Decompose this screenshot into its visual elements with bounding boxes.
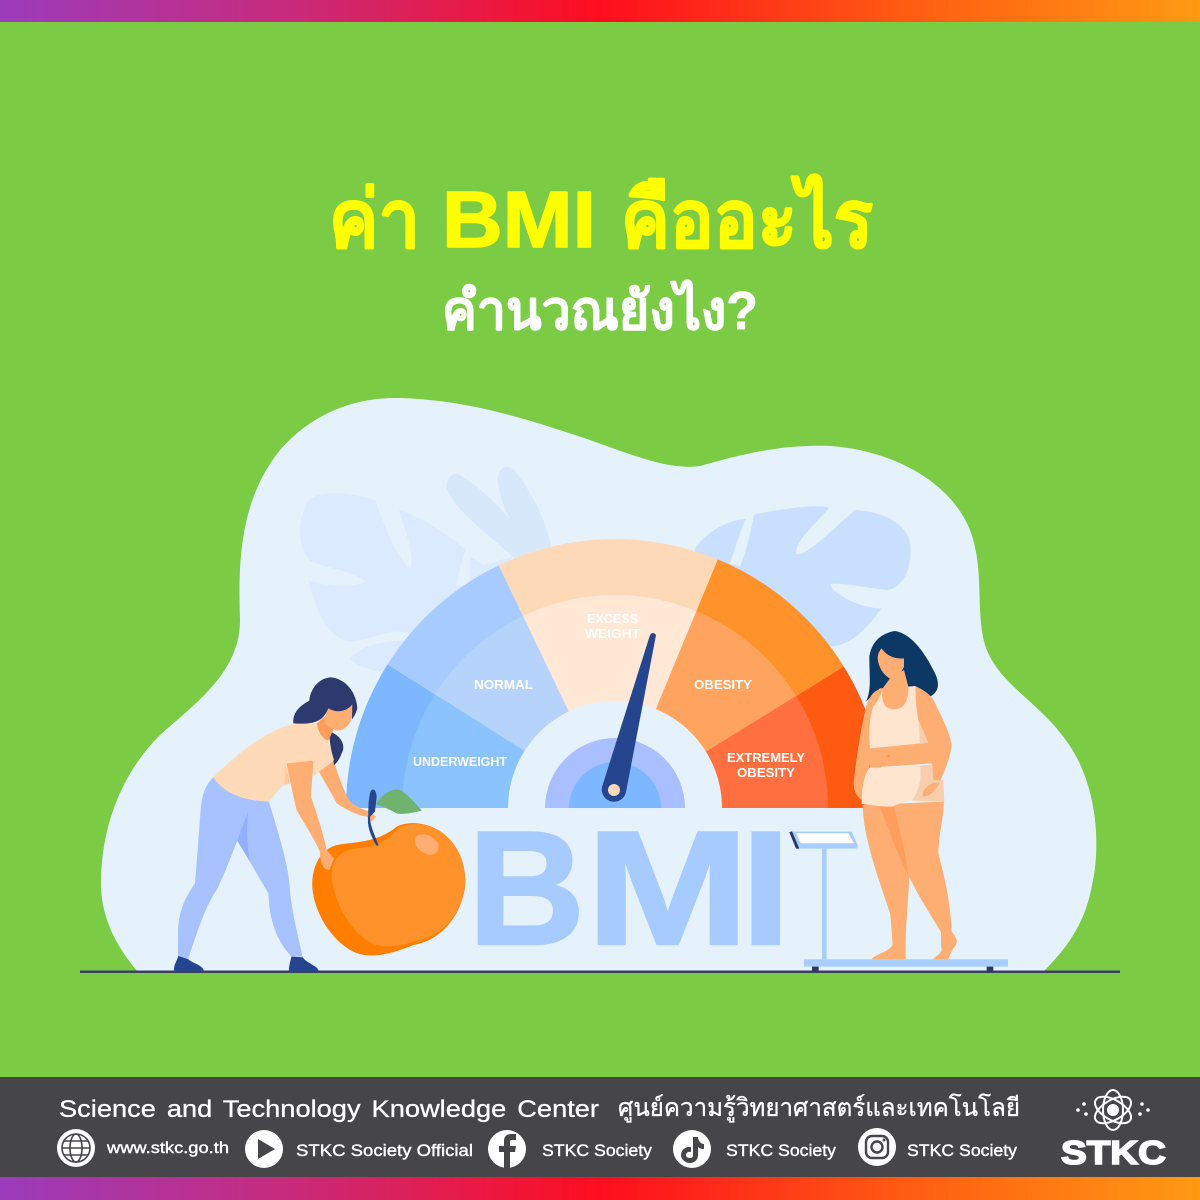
- far fronds: [447, 467, 552, 558]
- top gradient bar: [0, 0, 1200, 22]
- icon: facebook: [488, 1130, 526, 1168]
- label: obesity: OBESITY: [694, 677, 752, 692]
- label: excess weight: EXCESS: [587, 611, 638, 626]
- footer heading english: Science and Technology Knowledge Center: [59, 1096, 599, 1123]
- background blob: [101, 398, 1096, 972]
- website text: www.stkc.go.th: [106, 1140, 229, 1157]
- right leaf: [695, 506, 911, 647]
- label: extremely obesity: OBESITY: [737, 765, 795, 780]
- label: extremely obesity: EXTREMELY: [727, 750, 805, 765]
- facebook text: STKC Society: [542, 1141, 653, 1160]
- title: ค่า: [329, 175, 420, 264]
- gauge needle: [602, 633, 656, 802]
- logo wordmark: STKC: [1061, 1134, 1166, 1171]
- big BMI letters: M: [586, 798, 749, 979]
- icon: youtube play: [245, 1130, 283, 1168]
- label: excess weight: WEIGHT: [585, 626, 640, 641]
- footer panel: [0, 1077, 1200, 1177]
- big BMI letters: I: [741, 798, 791, 979]
- label: excess weight: [585, 611, 640, 641]
- youtube text: STKC Society Official: [296, 1141, 473, 1160]
- ground line: [80, 970, 1120, 973]
- tiktok text: STKC Society: [726, 1141, 837, 1160]
- woman holding apple: [174, 677, 376, 972]
- icon: instagram: [858, 1128, 896, 1166]
- label: underweight: UNDERWEIGHT: [413, 754, 507, 769]
- woman on the scale: [854, 631, 957, 959]
- label: normal: NORMAL: [474, 677, 533, 692]
- monstera leaves: [300, 467, 911, 672]
- STKC logo: [1061, 1090, 1166, 1171]
- bottom gradient bar: [0, 1177, 1200, 1200]
- title: BMI: [442, 175, 596, 264]
- title: [329, 173, 873, 264]
- BMI gauge: [346, 539, 884, 808]
- icon: website globe: [57, 1129, 95, 1167]
- left leaf: [300, 493, 512, 672]
- logo atom mark: [1076, 1090, 1150, 1130]
- weighing scale: [789, 831, 1008, 972]
- instagram text: STKC Society: [907, 1141, 1018, 1160]
- subtitle: คำนวณยังไง?: [442, 279, 758, 341]
- gauge outer ring: [346, 539, 884, 808]
- big BMI letters: B: [468, 798, 585, 979]
- icon: tiktok: [673, 1130, 711, 1168]
- footer heading thai: ศูนย์ความรู้วิทยาศาสตร์และเทคโนโลยี: [618, 1093, 1020, 1123]
- title: คืออะไร: [621, 173, 873, 264]
- label: extremely obesity: [727, 750, 805, 780]
- apple: [312, 789, 465, 955]
- gauge hub: [508, 701, 722, 808]
- gauge inner ring: [402, 595, 828, 808]
- big BMI letters: [468, 798, 791, 979]
